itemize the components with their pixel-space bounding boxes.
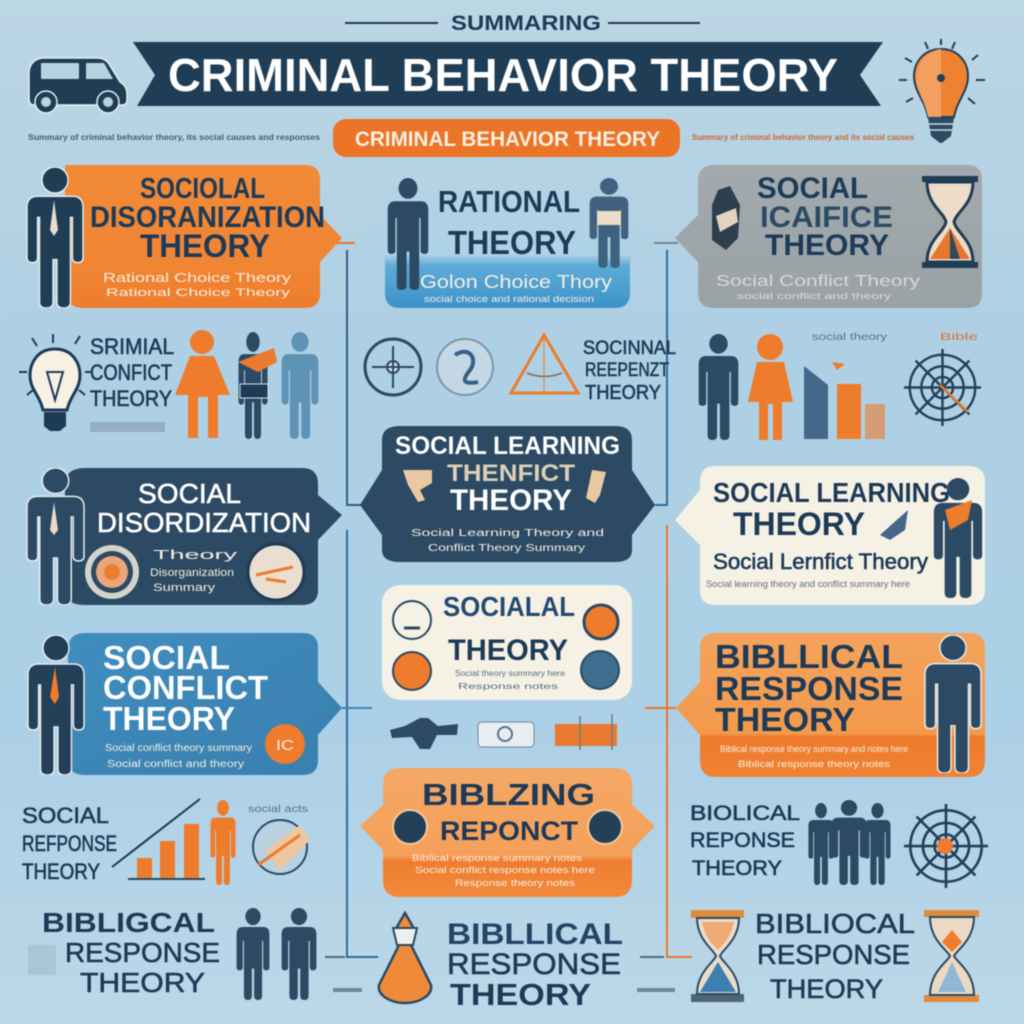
panel: social learning (dark center): SOCIAL LEARNING: [395, 432, 620, 460]
group: biblical right row: REPONSE: [690, 829, 795, 852]
panel: social disorganization (dark): Theory: [153, 547, 238, 562]
person: [282, 908, 316, 1000]
panel: social theory (cream center): [382, 585, 632, 700]
panel: social conflict (blue): CONFLICT: [103, 669, 268, 706]
panel: social theory (cream center): Response notes: [458, 682, 558, 691]
panel: social conflict (blue): [28, 633, 342, 775]
small dotted label: [333, 988, 362, 992]
panel: biblical response (orange): Biblical response theory summary and notes here: [720, 744, 908, 754]
group: biblical bottom right: THEORY: [770, 974, 883, 1004]
panel: social learning (dark center): Social Learning Theory and: [411, 528, 604, 539]
panel: social disorganization (dark): SOCIAL: [138, 478, 241, 509]
group: biblical bottom center: RESPONSE: [447, 948, 621, 981]
panel: social icarifice theory (gray): ICAIFICE: [760, 201, 893, 234]
group: biblical right row: THEORY: [692, 857, 782, 880]
group: biblical bottom center: BIBLLICAL: [447, 918, 623, 951]
group: center icons row: SOCINNAL: [583, 338, 676, 359]
icon: target wheel: [365, 339, 421, 395]
small caption right: Summary of criminal behavior theory and its social causes: [692, 133, 915, 142]
group: social conflict row left: SRIMIAL: [90, 334, 174, 359]
panel: social theory (cream center): SOCIALAL: [443, 591, 575, 622]
panel: rational theory (blue): social choice and rational decision: [424, 294, 594, 304]
icon: target: [85, 545, 139, 599]
icon: blue badge: [581, 651, 619, 689]
group: biblical bottom center: [379, 913, 675, 1012]
panel: social conflict (blue): THEORY: [103, 700, 235, 737]
panel: social learning (cream): [675, 466, 985, 605]
group: social conflict row left: CONFICT: [90, 360, 172, 385]
person orange: [748, 334, 793, 440]
person dark: [238, 332, 277, 439]
panel: rational theory (blue): Golon Choice Thory: [420, 272, 612, 292]
panel: social conflict (blue): Social conflict and theory: [107, 759, 244, 770]
person blue: [282, 332, 318, 439]
panel: social learning (cream): THEORY: [733, 506, 865, 542]
panel: social theory (cream center): Social theory summary here: [455, 669, 566, 678]
group: center icons row: [365, 335, 676, 404]
group: center icons row: REEPENZT: [585, 360, 669, 381]
blurred doodle label: social acts: [248, 804, 308, 815]
icon: hand left: [403, 470, 432, 502]
panel: social conflict (blue): Social conflict theory summary: [105, 743, 252, 754]
blurred label: social theory: [812, 332, 887, 343]
group: small tools row: [390, 714, 617, 750]
panel: biblzing repont (orange center): BIBLZING: [422, 777, 595, 812]
icon: web wheel: [904, 349, 981, 426]
person: [237, 908, 269, 1000]
panel: social learning (cream): Social learning theory and conflict summary here: [706, 579, 910, 589]
icon: hourglass left: [691, 910, 744, 1002]
person right: [590, 178, 628, 268]
group: biblical right row: [690, 800, 988, 888]
panel: social learning (cream): Social Lernfict Theory: [713, 549, 928, 574]
panel: social disorganization (orange): Rational Choice Theory: [106, 287, 291, 299]
header eyebrow: SUMMARING: [451, 12, 601, 35]
panel: biblzing repont (orange center): Biblical response summary notes: [412, 853, 583, 863]
subtitle pill: CRIMINAL BEHAVIOR THEORY: [355, 128, 660, 151]
person with tie: [27, 167, 83, 308]
icon: white tool: [478, 722, 534, 747]
panel: social icarifice theory (gray): THEORY: [765, 229, 889, 262]
panel: social learning (dark center): THENFICT: [447, 460, 575, 487]
person left: [388, 178, 428, 290]
panel: social disorganization (dark): Disorganization: [150, 567, 234, 579]
icon: dark tool: [390, 718, 458, 749]
blurred orange label: Bible: [940, 332, 979, 343]
group: biblical bottom left: THEORY: [80, 967, 205, 998]
icon: orange badge bottom: [393, 652, 431, 690]
group: biblical bottom right: RESPONSE: [757, 939, 910, 970]
panel: social icarifice theory (gray): Social Conflict Theory: [716, 273, 920, 290]
panel: social learning (dark center): Conflict Theory Summary: [428, 543, 585, 554]
group: biblical bottom left: RESPONSE: [65, 937, 220, 968]
panel: social disorganization (dark): DISORDIZATION: [97, 507, 311, 538]
panel: social learning (dark center): THEORY: [450, 484, 572, 517]
icon: orange flask bulb: [379, 913, 431, 1003]
person orange: [175, 330, 230, 438]
panel: social learning (dark center): [360, 426, 655, 562]
person: [27, 468, 84, 605]
icon: orange badge: [265, 724, 305, 764]
panel: social icarifice theory (gray): SOCIAL: [757, 172, 868, 205]
panel: biblical response (orange): Biblical response theory notes: [738, 759, 891, 769]
icon: hand right: [586, 470, 606, 503]
panel: social disorganization (dark): [27, 468, 342, 605]
small caption left: Summary of criminal behavior theory, its social causes and responses: [28, 133, 321, 142]
panel: social conflict (blue): SOCIAL: [103, 639, 230, 676]
group: social conflict row left: [19, 330, 318, 439]
person with tie: [28, 635, 84, 775]
group: social response row: REFPONSE: [22, 831, 117, 856]
bar chart: [804, 362, 885, 439]
connector lines: [320, 243, 692, 957]
group: social response row: THEORY: [22, 859, 100, 884]
bar chart: [112, 799, 205, 879]
group: biblical bottom center: THEORY: [450, 977, 591, 1012]
panel: social disorganization (orange): DISORANIZATION: [90, 201, 325, 234]
icon: light bulb with rays: [899, 39, 985, 143]
icon: map: [248, 544, 304, 600]
person: [934, 478, 982, 598]
icon: globe figure: [437, 339, 493, 395]
panel: rational theory (blue): [362, 175, 652, 308]
panel: biblical response (orange): [676, 633, 985, 777]
panel: social disorganization (orange): [27, 165, 342, 308]
title banner: CRIMINAL BEHAVIOR THEORY: [168, 49, 838, 101]
panel: biblical response (orange): RESPONSE: [715, 670, 903, 707]
group: social response row: [22, 799, 310, 885]
group: social conflict row left: THEORY: [90, 386, 172, 411]
group: biblical bottom right: [691, 908, 979, 1004]
panel: rational theory (blue): THEORY: [448, 224, 576, 261]
people group: [808, 800, 891, 885]
icon: hourglass: [922, 176, 978, 268]
icon: hand: [880, 510, 908, 540]
panel: biblzing repont (orange center): REPONCT: [440, 816, 579, 846]
group: center icons row: THEORY: [585, 382, 661, 404]
panel: biblzing repont (orange center): Response theory notes: [455, 878, 576, 888]
group: biblical bottom left: [28, 907, 362, 1000]
subtitle pill: [333, 119, 680, 157]
panel: biblzing repont (orange center): Social conflict response notes here: [415, 865, 595, 875]
icon: figure: [712, 186, 740, 250]
icon: clock: [393, 601, 431, 639]
icon: orange badge top: [584, 605, 618, 639]
panel: biblical response (orange): THEORY: [715, 701, 855, 738]
icon: orange badge: IC: [276, 737, 294, 754]
icon: badge left: [393, 810, 427, 844]
icon: bulb: [19, 334, 92, 431]
group: biblical bottom left: BIBLIGCAL: [42, 907, 215, 938]
person: [925, 635, 981, 773]
icon: orange tool: [555, 714, 617, 750]
icon: van: [29, 58, 127, 113]
panel: social learning (cream): SOCIAL LEARNING: [713, 477, 950, 508]
group: right icons row: [699, 332, 981, 440]
panel: social disorganization (dark): Summary: [153, 582, 216, 594]
person orange: [210, 800, 236, 885]
person dark: [699, 334, 738, 440]
group: biblical bottom right: BIBLIOCAL: [755, 908, 915, 939]
panel: social icarifice theory (gray): [675, 165, 982, 308]
panel: biblzing repont (orange center): [360, 768, 655, 897]
panel: rational theory (blue): RATIONAL: [438, 184, 580, 219]
icon: circle with pencil: [253, 820, 310, 874]
panel: biblical response (orange): BIBLLICAL: [715, 638, 903, 675]
icon: hourglass right: [924, 910, 979, 1002]
small dotted label: [637, 988, 675, 992]
group: social response row: SOCIAL: [22, 803, 109, 828]
blurred doodle: [28, 945, 56, 975]
panel: social disorganization (orange): SOCIOLAL: [140, 173, 265, 205]
icon: orange triangle: [511, 335, 578, 393]
panel: social icarifice theory (gray): social conflict and theory: [737, 291, 892, 301]
group: biblical right row: BIOLICAL: [690, 802, 800, 825]
panel: social disorganization (orange): Rational Choice Theory: [103, 270, 292, 285]
icon: badge right: [588, 810, 622, 844]
panel: social theory (cream center): THEORY: [448, 634, 568, 667]
icon: target wheel: [904, 804, 988, 888]
panel: social disorganization (orange): THEORY: [140, 228, 270, 264]
